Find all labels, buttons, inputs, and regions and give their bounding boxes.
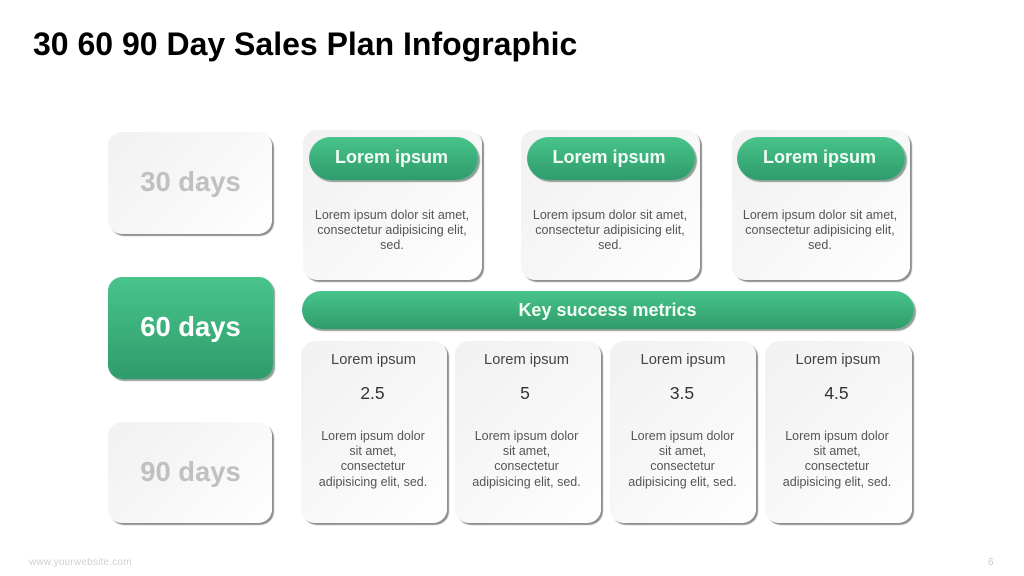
metric text 4: [783, 429, 891, 489]
metric text 1: [319, 429, 427, 489]
title: 30 60 90 Day Sales Plan Infographic: [33, 26, 577, 62]
banner: key success metrics: Key success metrics: [518, 300, 697, 320]
metric value 3: 3.5: [670, 383, 694, 403]
label: 90 days: 90 days: [140, 456, 241, 487]
pill heading 3: Lorem ipsum: [763, 147, 876, 167]
metric text 4: consectetur: [805, 459, 869, 473]
label: 30 days: 30 days: [140, 166, 241, 197]
panel: top card 3: [732, 130, 910, 280]
metric text 2: sit amet,: [503, 444, 550, 458]
metric heading 4: Lorem ipsum: [796, 352, 880, 368]
metric text 4: sit amet,: [813, 444, 861, 458]
pill heading 1: Lorem ipsum: [335, 147, 448, 167]
metric text 3: [628, 429, 737, 489]
text block 3: consectetur adipisicing elit,: [745, 223, 895, 237]
metric text 3: consectetur: [650, 459, 715, 473]
footer: page number: 6: [988, 557, 994, 568]
footer: website: www.yourwebsite.com: [29, 557, 132, 568]
metric text 2: [472, 429, 581, 489]
metric text 4: Lorem ipsum dolor: [785, 429, 889, 443]
metric text 2: consectetur: [494, 459, 559, 473]
panel: metric card 2: [455, 341, 601, 523]
panel: top card 1: [303, 130, 482, 280]
metric value 2: 5: [520, 383, 530, 403]
metric heading 3: Lorem ipsum: [641, 352, 725, 368]
metric value 1: 2.5: [360, 383, 385, 403]
text block 1: [315, 208, 469, 252]
metric text 2: Lorem ipsum dolor: [475, 429, 578, 443]
metric text 3: Lorem ipsum dolor: [631, 429, 734, 443]
pill heading 2: Lorem ipsum: [552, 147, 666, 167]
metric text 4: adipisicing elit, sed.: [783, 475, 891, 489]
text block 2: sed.: [598, 238, 622, 252]
panel: metric card 3: [610, 341, 756, 523]
panel: 30 days: [108, 132, 272, 234]
text block 2: consectetur adipisicing elit,: [535, 223, 685, 237]
text block 2: Lorem ipsum dolor sit amet,: [533, 208, 687, 222]
banner: key success metrics: [302, 291, 914, 329]
panel: metric card 1: [301, 341, 447, 523]
metric value 4: 4.5: [824, 383, 849, 403]
metric text 1: sit amet,: [349, 444, 397, 458]
metric text 3: adipisicing elit, sed.: [628, 475, 737, 489]
panel: 60 days: [108, 277, 273, 379]
metric text 1: adipisicing elit, sed.: [319, 475, 427, 489]
label: 60 days: 60 days: [140, 311, 241, 342]
metric text 1: consectetur: [341, 459, 405, 473]
metric heading 2: Lorem ipsum: [484, 352, 569, 368]
metric text 2: adipisicing elit, sed.: [472, 475, 581, 489]
text block 1: consectetur adipisicing elit,: [317, 223, 467, 237]
text block 3: sed.: [808, 238, 832, 252]
metric text 3: sit amet,: [659, 444, 706, 458]
text block 1: Lorem ipsum dolor sit amet,: [315, 208, 469, 222]
pill heading 1: [309, 137, 478, 180]
metric text 1: Lorem ipsum dolor: [321, 429, 425, 443]
panel: top card 2: [521, 130, 700, 280]
text block 2: [533, 208, 687, 252]
text block 3: [743, 208, 897, 252]
text block 1: sed.: [380, 238, 404, 252]
text block 3: Lorem ipsum dolor sit amet,: [743, 208, 897, 222]
pill heading 3: [737, 137, 905, 180]
pill heading 2: [527, 137, 695, 180]
panel: 90 days: [108, 422, 272, 523]
panel: metric card 4: [765, 341, 912, 523]
metric heading 1: Lorem ipsum: [331, 352, 416, 368]
